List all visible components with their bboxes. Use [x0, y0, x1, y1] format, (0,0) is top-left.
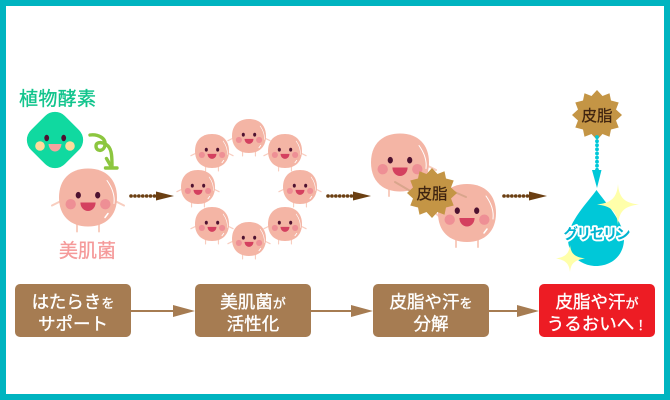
character: right bacterium: [279, 170, 321, 207]
arrow: dotted step 1 to 2: [131, 192, 174, 200]
label: skin bacterium: 美肌菌: [59, 240, 116, 262]
icon: sebum star: [572, 90, 622, 140]
arms reaching over the sebum: [395, 182, 466, 197]
character: left bacterium: [371, 134, 429, 192]
box: breakdown: 皮脂や汗を: [389, 292, 473, 312]
arrow: dotted step 3 to 4: [504, 192, 547, 200]
character: lower right bacterium: [264, 207, 306, 244]
connector: box 2 to box 3: [311, 305, 373, 317]
box: breakdown: 分解: [414, 314, 448, 334]
step 2 illustration: ring of bacteria: [177, 119, 321, 259]
character: upper right bacterium: [264, 134, 306, 171]
step 1 illustration: plant enzyme and skin bacterium: [19, 88, 124, 262]
box: support: サポート: [38, 314, 108, 334]
box: breakdown: [373, 284, 489, 337]
left bacterium limbs: [389, 166, 436, 196]
right bacterium limbs: [428, 207, 478, 247]
box: activation: 美肌菌が: [220, 292, 286, 312]
character: upper left bacterium: [191, 134, 233, 171]
box: support: [15, 284, 131, 337]
icon: sebum star: 皮脂: [581, 107, 613, 125]
icon: large sparkle: [597, 184, 639, 225]
box: moisturize: [539, 284, 655, 337]
step 3 illustration: bacteria breaking down sebum: [371, 134, 496, 247]
step 4 illustration: sebum becomes glycerin: [556, 90, 639, 272]
connector: box 3 to box 4: [489, 305, 539, 317]
arrow: dotted step 2 to 3: [328, 192, 371, 200]
box: activation: [195, 284, 311, 337]
icon: small sparkle: [556, 245, 585, 272]
icon: glycerin drop: [568, 190, 624, 266]
connector: box 1 to box 2: [131, 305, 195, 317]
box: moisturize: うるおいへ！: [547, 314, 647, 334]
box: activation: 活性化: [227, 314, 279, 334]
box: moisturize: 皮脂や汗が: [555, 292, 639, 312]
icon: plant enzyme character: [21, 106, 89, 174]
label: plant enzyme: 植物酵素: [19, 88, 96, 110]
character: skin bacterium: [52, 168, 124, 232]
character: top bacterium: [228, 119, 270, 156]
box: support: はたらきを: [32, 292, 114, 312]
character: right bacterium: [438, 184, 496, 242]
arrow: dotted cyan down: [592, 137, 602, 188]
icon: sebum star: 皮脂: [416, 185, 448, 203]
character: lower left bacterium: [191, 207, 233, 244]
label: glycerin: グリセリン: [564, 225, 630, 243]
character: left bacterium: [177, 170, 219, 207]
icon: green curly arrow: [90, 135, 117, 168]
character: bottom bacterium: [228, 222, 270, 259]
